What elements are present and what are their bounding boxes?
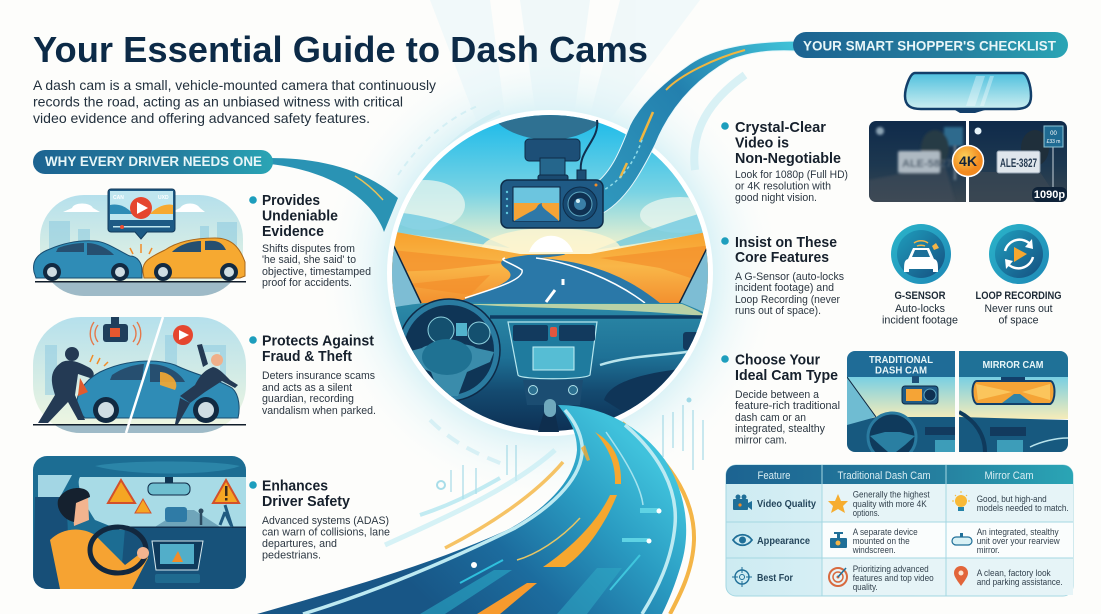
4K badge: 4K: [959, 153, 977, 169]
text block: provides undeniable evidence: 'he said, she said' to: [262, 254, 356, 266]
section pill: smart shopper's checklist: YOUR SMART SHOPPER'S CHECKLIST: [803, 38, 1056, 54]
panel: traditional dash cam: TRADITIONAL: [869, 354, 934, 366]
winding road from dashboard to bottom: [257, 405, 694, 614]
right dash vent and glovebox: [600, 350, 700, 365]
row: video quality: [733, 490, 1069, 519]
steering wheel: [90, 527, 146, 573]
table header: Feature: [758, 470, 790, 482]
comparison table: [726, 465, 1073, 596]
row: video quality: options.: [853, 508, 880, 519]
orange land: [390, 231, 712, 310]
text block: provides undeniable evidence: objective, timestamped: [262, 266, 371, 278]
text block: core features: incident footage) and: [735, 282, 834, 294]
text block: enhances driver safety: Advanced systems (ADAS): [262, 515, 389, 527]
row: video quality: models needed to match.: [977, 503, 1069, 514]
steering wheel: [398, 299, 500, 401]
sun: [482, 228, 620, 252]
table body: [726, 465, 1073, 596]
text block: enhances driver safety: departures, and: [262, 538, 337, 550]
row: best for: Best For: [757, 572, 793, 584]
text block: choose cam type: mirror cam.: [735, 434, 787, 446]
video popup: [108, 189, 175, 239]
text block: protects against fraud and theft: guardian, recording: [262, 393, 354, 405]
row: best for: [732, 564, 1063, 593]
video quality comparison image: 00: [1050, 131, 1057, 137]
row: best for: A clean, factory look: [977, 568, 1051, 579]
text block: protects against fraud and theft: Protects Against: [262, 332, 374, 350]
text block: enhances driver safety: [249, 478, 390, 562]
video quality comparison image: £33 m: [1047, 139, 1060, 145]
gear lever: [538, 399, 559, 432]
text block: enhances driver safety: Driver Safety: [262, 493, 351, 510]
text block: enhances driver safety: Enhances: [262, 478, 328, 494]
dash cam device: [501, 120, 603, 228]
4K badge: [952, 146, 984, 176]
text block: provides undeniable evidence: [249, 192, 371, 289]
sky: [388, 112, 713, 257]
row: best for: Prioritizing advanced: [853, 564, 929, 575]
blurry side: ALE-5827: [902, 158, 952, 170]
G-sensor label: incident footage: [882, 314, 958, 326]
text block: choose cam type: Choose Your: [735, 352, 820, 368]
video popup: CAN: [113, 195, 124, 201]
blue car: [77, 361, 239, 418]
text block: crystal-clear video: Crystal-Clear: [735, 119, 826, 136]
intro paragraph: A dash cam is a small, vehicle-mounted camera that continuously: [33, 77, 436, 93]
row: appearance: mounted on the: [853, 536, 910, 547]
rear-view mount top: [498, 115, 600, 138]
intro paragraph: video evidence and offering advanced safety features.: [33, 110, 370, 126]
title: Your Essential Guide to Dash Cams: [33, 29, 648, 70]
road edge lines: [303, 410, 675, 614]
orange lane markers: [477, 432, 621, 614]
road surface: [257, 405, 686, 614]
text block: choose cam type: dash cam or an: [735, 412, 806, 424]
icon: G-sensor: [891, 224, 951, 284]
car ahead: [165, 507, 187, 522]
section pill: smart shopper's checklist: [793, 32, 1068, 58]
panel: traditional dash cam: DASH CAM: [875, 364, 927, 376]
text block: choose cam type: Ideal Cam Type: [735, 367, 838, 384]
panel: mirror cam: MIRROR CAM: [982, 359, 1044, 371]
row: appearance: Appearance: [757, 535, 810, 547]
pedestrian: [220, 505, 232, 527]
row: best for: quality.: [853, 582, 878, 593]
text block: core features: runs out of space).: [735, 305, 821, 317]
1090p tag: 1090p: [1034, 189, 1065, 201]
blue car: [34, 241, 142, 281]
background halo and light rays: [315, 0, 785, 508]
text block: provides undeniable evidence: Shifts disputes from: [262, 243, 355, 255]
text block: core features: Core Features: [735, 249, 829, 266]
camera with signal waves: [90, 317, 141, 345]
G-sensor label: [882, 290, 958, 326]
central circle: windshield view: [380, 110, 720, 440]
loop recording label: of space: [998, 314, 1038, 326]
row: video quality: Good, but high-and: [977, 494, 1047, 505]
video popup: UXD: [158, 195, 169, 201]
orange car: [143, 238, 245, 281]
row: video quality: Generally the highest: [853, 490, 930, 500]
text block: core features: A G-Sensor (auto-locks: [735, 271, 845, 283]
thief: [38, 347, 94, 423]
illustration: fraud and theft: [33, 317, 246, 433]
text block: protects against fraud and theft: Fraud & Theft: [262, 348, 352, 365]
falling man: [175, 344, 238, 424]
loop recording label: [976, 290, 1062, 326]
row: appearance: A separate device: [853, 527, 918, 538]
section pill: why every driver needs one: [33, 150, 273, 174]
text block: crystal-clear video: good night vision.: [735, 192, 817, 204]
text block: crystal-clear video: [721, 119, 848, 204]
console: [508, 322, 597, 379]
text block: protects against fraud and theft: Deters insurance scams: [262, 370, 376, 382]
loop recording label: LOOP RECORDING: [976, 290, 1062, 302]
text block: protects against fraud and theft: [249, 332, 376, 417]
row: appearance: An integrated, stealthy: [977, 527, 1059, 538]
winding road ahead: [455, 254, 660, 303]
pale lane strips: [420, 508, 662, 614]
illustration: collision with video evidence: [34, 189, 246, 296]
text block: choose cam type: integrated, stealthy: [735, 423, 826, 435]
row: best for: and parking assistance.: [977, 577, 1063, 588]
row: video quality: quality with more 4K: [853, 499, 927, 510]
text block: crystal-clear video: Non-Negotiable: [735, 150, 841, 167]
text block: crystal-clear video: or 4K resolution with: [735, 180, 831, 192]
left stream from pill into circle: [270, 158, 398, 232]
table header: [726, 465, 1073, 484]
intro paragraph: [33, 77, 436, 126]
text block: protects against fraud and theft: vandalism when parked.: [262, 405, 376, 417]
video quality comparison image: ALE-3827: [1000, 158, 1037, 170]
text block: crystal-clear video: Look for 1080p (Full HD): [735, 169, 848, 181]
loop recording label: Never runs out: [984, 303, 1053, 315]
text block: protects against fraud and theft: and acts as a silent: [262, 382, 352, 394]
icon: rear view mirror: [905, 73, 1031, 113]
text block: enhances driver safety: pedestrians.: [262, 550, 321, 562]
sharp side: [974, 128, 982, 134]
driver: [74, 498, 89, 526]
text block: provides undeniable evidence: Evidence: [262, 223, 324, 240]
clouds: [400, 180, 700, 228]
text block: choose cam type: Decide between a: [735, 389, 819, 401]
G-sensor label: Auto-locks: [895, 303, 946, 315]
G-sensor label: G-SENSOR: [894, 290, 946, 302]
screen: [152, 541, 203, 570]
row: best for: features and top video: [853, 573, 934, 584]
row: appearance: [733, 527, 1060, 556]
dashboard: [396, 302, 704, 431]
row: appearance: mirror.: [977, 545, 1000, 556]
table header: Mirror Cam: [984, 470, 1034, 482]
row: appearance: windscreen.: [852, 545, 896, 556]
text block: provides undeniable evidence: proof for accidents.: [262, 277, 352, 289]
hazard triangles: [108, 480, 135, 503]
video quality comparison image: [869, 121, 1067, 202]
panel: mirror cam: [959, 351, 1068, 452]
text block: provides undeniable evidence: Undeniable: [262, 208, 338, 224]
windshield pillars: [392, 246, 420, 328]
text block: choose cam type: [721, 352, 840, 446]
row: video quality: Video Quality: [757, 498, 816, 510]
text block: enhances driver safety: can warn of collisions, lane: [262, 526, 390, 538]
diagonal split: [126, 317, 163, 433]
text block: choose cam type: feature-rich traditional: [735, 400, 840, 412]
panel: traditional dash cam: [847, 351, 955, 461]
driver seat: [33, 497, 68, 589]
text block: core features: [721, 234, 845, 317]
icon: loop recording: [989, 224, 1049, 284]
camera on windshield: [912, 376, 919, 383]
blurry side: [869, 127, 963, 202]
mirror: [148, 483, 190, 495]
road light streaks left: [385, 423, 694, 614]
text block: core features: Insist on These: [735, 234, 837, 251]
illustration: driver safety ADAS: [33, 456, 246, 589]
upper right road to checklist pill: [590, 41, 795, 218]
text block: provides undeniable evidence: Provides: [262, 192, 320, 209]
text block: core features: Loop Recording (never: [735, 294, 840, 306]
table header: Traditional Dash Cam: [838, 470, 930, 482]
text block: crystal-clear video: Video is: [735, 134, 789, 152]
section pill: why every driver needs one: WHY EVERY DRIVER NEEDS ONE: [45, 154, 262, 169]
intro paragraph: records the road, acting as an unbiased witness with critical: [33, 94, 403, 110]
row: appearance: unit over your rearview: [977, 536, 1060, 547]
